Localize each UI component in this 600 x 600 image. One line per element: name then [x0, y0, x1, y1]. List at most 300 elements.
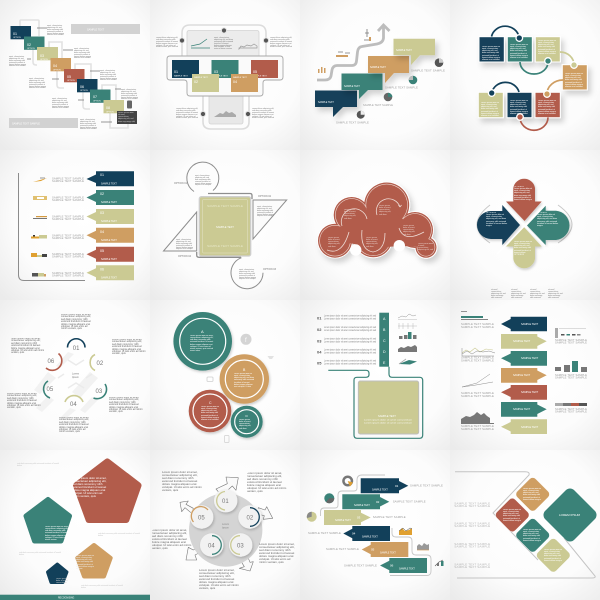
- tab 03: SAMPLE TEXT: [214, 74, 229, 78]
- dots: [179, 28, 269, 117]
- step 01: 01: [73, 346, 80, 352]
- pentagon teal: Lorem ipsum dolor sit amet, consectetuer adipiscing elit, sed diam nonummy nibh euismod tincidunt ut laoreet dolore magna aliquam erat volutpat. Ut wisi enim ad minim veniam: [45, 526, 68, 541]
- left captions: [461, 322, 494, 431]
- circle A: A: [201, 329, 204, 334]
- gray captions: [308, 484, 443, 568]
- numbered rows: Lorem ipsum dolor sit amet consectetuer adipiscing elit sed: [324, 340, 376, 344]
- gray captions: SAMPLE TEXT SAMPLE: [454, 522, 490, 526]
- squares: [478, 37, 587, 118]
- gray captions: SAMPLE TEXT SAMPLE: [52, 271, 84, 275]
- teal column: E: [383, 361, 386, 365]
- text blocks: [156, 36, 294, 122]
- teal frame line: [328, 367, 423, 438]
- bottom text columns: [491, 288, 564, 298]
- numbered rows: Lorem ipsum dolor sit amet consectetuer adipiscing elit sed: [324, 328, 376, 332]
- center marks: [58, 360, 92, 388]
- tag 01: [361, 478, 408, 493]
- tag 03: [324, 510, 371, 525]
- gray captions: SAMPLE TEXT SAMPLE: [363, 103, 393, 107]
- tag 01: 01: [395, 484, 399, 488]
- square texts: [481, 40, 584, 116]
- text blocks: [176, 174, 275, 281]
- diamond olive: Lorem ipsum dolor sit amet, consectetuer adipiscing elit, sed diam nonummy nibh euismod tincidunt ut laoreet dolore magna: [544, 549, 562, 562]
- left triangle: [164, 212, 197, 251]
- outline arrows: [180, 477, 273, 571]
- cloud inner fill: [320, 184, 435, 256]
- left captions: SAMPLE TEXT SAMPLE: [461, 424, 494, 428]
- cross frame: [167, 56, 283, 96]
- arrow bottom olive: OPTION 03: [514, 254, 524, 256]
- gray captions: SAMPLE TEXT SAMPLE: [373, 515, 406, 519]
- arc arrows: [327, 199, 424, 252]
- banner bottom: SAMPLE TEXT SAMPLE: [12, 122, 40, 126]
- numbered rows: 02: [317, 327, 322, 332]
- gray captions: SAMPLE TEXT SAMPLE: [393, 500, 426, 504]
- tag 01: SAMPLE TEXT: [372, 488, 388, 492]
- left captions: SAMPLE TEXT SAMPLE: [461, 358, 494, 362]
- olive square: [199, 197, 251, 256]
- step 05: OPTION: [67, 80, 75, 82]
- step 07: 07: [93, 95, 97, 99]
- gray captions: [336, 68, 445, 124]
- panel: lettered column with big box: [317, 313, 423, 438]
- arrow right teal: Lorem ipsum dolor sit amet, consectetuer adipiscing elit, sed diam nonummy nibh euismod tincidunt ut laoreet dolore magna: [537, 214, 558, 227]
- step 08: OPTION: [106, 112, 114, 114]
- gray captions: SAMPLE TEXT SAMPLE: [454, 565, 490, 569]
- arrow bottom olive: Lorem ipsum dolor sit amet, consectetuer adipiscing elit, sed diam nonummy nibh euismod tincidunt ut laoreet dolore: [514, 241, 532, 254]
- panel: staircase speech bubbles: [315, 25, 445, 124]
- tag teal: SAMPLE TEXT: [521, 357, 539, 360]
- tab 04: 04: [233, 80, 237, 84]
- node 05: [190, 505, 213, 529]
- olive square: SAMPLE TEXT SAMPLE: [207, 245, 243, 248]
- outer frame: [197, 194, 252, 257]
- tab 05: 05: [253, 70, 257, 74]
- tag 02: 02: [376, 500, 380, 504]
- big diamond: [541, 486, 599, 544]
- gray captions: SAMPLE TEXT SAMPLE: [52, 274, 84, 278]
- gray captions: SAMPLE TEXT SAMPLE: [52, 234, 84, 238]
- option labels: OPTION 04: [178, 255, 192, 258]
- circle A: [173, 312, 232, 371]
- left captions: SAMPLE TEXT SAMPLE: [461, 394, 494, 398]
- left captions: SAMPLE TEXT SAMPLE: [461, 322, 494, 326]
- numbered rows: Lorem ipsum dolor sit amet consectetuer adipiscing elit sed: [324, 350, 376, 354]
- tag 03: 03: [100, 211, 104, 215]
- gray captions: SAMPLE TEXT SAMPLE: [454, 544, 490, 548]
- arrow left navy: OPTION 04: [486, 212, 496, 214]
- mini charts: [398, 314, 417, 364]
- tag 05: 05: [100, 249, 104, 253]
- tag 03: [86, 209, 134, 224]
- icon: device: [127, 100, 132, 108]
- tag 02: 02: [100, 192, 104, 196]
- right triangle: [253, 200, 287, 239]
- gray captions: SAMPLE TEXT SAMPLE: [336, 120, 369, 124]
- pentagon teal: [26, 500, 70, 542]
- node 05: 05: [198, 516, 205, 522]
- tag 02: [342, 494, 389, 509]
- cloud fill: [318, 182, 436, 258]
- panel: pentagons: [0, 462, 150, 600]
- step 03: [37, 47, 58, 61]
- gray captions: SAMPLE TEXT SAMPLE: [52, 252, 84, 256]
- gray captions: [52, 176, 84, 278]
- panel: alternating arrow tags with charts: [461, 312, 587, 434]
- right captions: SAMPLE TEXT SAMPLE: [555, 340, 587, 344]
- tag red: SAMPLE TEXT: [521, 391, 539, 394]
- frame line: [18, 173, 85, 280]
- outer pale ring: [319, 184, 435, 256]
- step 01: [10, 26, 31, 39]
- pies: [307, 476, 353, 522]
- circle B: B: [243, 368, 246, 372]
- text blocks: [152, 471, 298, 592]
- big disc: [189, 493, 262, 567]
- top gray panel: [187, 30, 259, 58]
- frame lines: [455, 472, 595, 578]
- diamond red: Lorem ipsum dolor sit amet, consectetuer adipiscing elit, sed diam nonummy nibh euismod tincidunt ut laoreet dolore magna: [503, 509, 521, 522]
- gray captions: SAMPLE TEXT SAMPLE: [454, 542, 490, 546]
- bubble navy: SAMPLE TEXT: [318, 101, 334, 104]
- panel: left pointing tag list: [18, 171, 134, 280]
- gray captions: SAMPLE TEXT SAMPLE: [308, 531, 341, 535]
- gray captions: [454, 502, 490, 569]
- left captions: SAMPLE TEXT SAMPLE: [461, 356, 494, 360]
- numbered rows: Lorem ipsum dolor sit amet consectetuer adipiscing elit sed: [324, 348, 376, 352]
- numbered rows: 05: [317, 360, 322, 366]
- side arcs: [477, 205, 572, 243]
- stair arrow: [317, 25, 390, 80]
- gray captions: SAMPLE TEXT SAMPLE: [52, 214, 84, 218]
- diamond teal: Lorem ipsum dolor sit amet, consectetuer adipiscing elit, sed diam nonummy nibh euismod tincidunt ut laoreet dolore magna: [523, 529, 541, 542]
- option labels: [174, 182, 277, 271]
- left charts: [461, 312, 495, 424]
- icon: phone: [224, 436, 229, 442]
- diamond red: [494, 497, 531, 533]
- tag 01: 01: [100, 173, 104, 177]
- big diamond: LOREM IPSUM: [559, 513, 581, 517]
- step 04: OPTION: [53, 70, 61, 72]
- gray captions: SAMPLE TEXT SAMPLE: [52, 236, 84, 240]
- panel: four circles: [173, 312, 274, 442]
- bubble olive: SAMPLE TEXT: [396, 49, 412, 52]
- tag 05: SAMPLE TEXT: [380, 552, 396, 554]
- pentagon navy: [48, 564, 68, 587]
- numbered rows: Lorem ipsum dolor sit amet consectetuer adipiscing elit sed: [324, 314, 376, 318]
- step 05: 05: [46, 387, 54, 393]
- option labels: OPTION 02: [258, 195, 272, 198]
- step 05: [64, 69, 84, 82]
- tag 06: 06: [390, 564, 394, 568]
- tag 02: [86, 190, 134, 205]
- connector loops: [20, 20, 128, 128]
- numbered rows: Lorem ipsum dolor sit amet consectetuer adipiscing elit sed: [324, 336, 376, 340]
- gray captions: SAMPLE TEXT SAMPLE: [454, 562, 490, 566]
- tag olive: SAMPLE TEXT: [513, 340, 531, 343]
- tag 04: SAMPLE TEXT: [101, 239, 117, 242]
- step 01: OPTION: [13, 37, 21, 39]
- option labels: OPTION 03: [263, 268, 277, 271]
- gray captions: SAMPLE TEXT SAMPLE: [52, 179, 84, 183]
- center label: [222, 523, 229, 530]
- panel: zigzag arrow tags: [307, 475, 444, 576]
- numbered rows: Lorem ipsum dolor sit amet consectetuer adipiscing elit sed: [324, 316, 376, 320]
- gray captions: SAMPLE TEXT SAMPLE: [454, 504, 490, 508]
- tag 03: SAMPLE TEXT: [101, 220, 117, 223]
- left captions: SAMPLE TEXT SAMPLE: [461, 427, 494, 431]
- bottom gray panel: [209, 94, 243, 124]
- node 03: 03: [237, 544, 244, 550]
- long shadows: [34, 352, 98, 420]
- gray captions: SAMPLE TEXT SAMPLE: [454, 502, 490, 506]
- tag 04: 04: [352, 532, 356, 536]
- icon: printer: [207, 377, 213, 382]
- tag 04: 04: [100, 230, 104, 234]
- step 02: 02: [27, 43, 31, 47]
- circle D: [231, 406, 263, 438]
- tab 03: 03: [214, 70, 218, 74]
- tag 06: [86, 265, 134, 280]
- gray captions: SAMPLE TEXT SAMPLE: [410, 484, 443, 488]
- tag 06: 06: [100, 268, 104, 272]
- left captions: SAMPLE TEXT SAMPLE: [461, 325, 494, 329]
- gray captions: SAMPLE TEXT SAMPLE: [52, 196, 84, 200]
- panel: diagonal step options: [9, 20, 140, 129]
- tab 04: [231, 74, 258, 92]
- numbered rows: [317, 314, 376, 366]
- circle D: D: [246, 414, 248, 418]
- bubble teal: SAMPLE TEXT: [344, 85, 360, 88]
- mini charts: [399, 528, 444, 566]
- diamond teal: [514, 517, 551, 554]
- tab 02: 02: [194, 80, 198, 84]
- gray captions: SAMPLE TEXT SAMPLE: [52, 254, 84, 258]
- panel: cross frame with five tabs: [156, 25, 294, 129]
- teal column: D: [383, 350, 386, 354]
- pentagon orange: Lorem ipsum dolor sit amet, consectetuer adipiscing elit, sed diam nonummy nibh euismod tincidunt ut laoreet dolore magna aliquam: [76, 555, 94, 570]
- banner top: SAMPLE TEXT: [87, 28, 105, 32]
- tag 04: [86, 228, 134, 243]
- bottom loop: [203, 96, 249, 129]
- arrow left navy: [477, 205, 520, 245]
- step 02: OPTION: [27, 48, 35, 50]
- step 06: 06: [48, 359, 55, 365]
- cloud base: [317, 182, 438, 259]
- mini charts: [31, 178, 47, 276]
- teal column: B: [383, 328, 386, 332]
- numbered rows: Lorem ipsum dolor sit amet consectetuer adipiscing elit sed: [324, 358, 376, 362]
- teal column: C: [383, 339, 386, 343]
- center label: Lorem: [222, 523, 229, 526]
- olive square: SAMPLE TEXT SAMPLE: [207, 205, 243, 208]
- step 06: OPTION: [80, 90, 88, 92]
- gray captions: SAMPLE TEXT SAMPLE: [385, 86, 418, 90]
- panel: red cloud of circles: [317, 182, 438, 259]
- node 02: 02: [246, 516, 254, 522]
- tag 05: 05: [371, 548, 375, 552]
- mini charts: [318, 29, 371, 73]
- gray captions: SAMPLE TEXT SAMPLE: [411, 68, 445, 72]
- olive square: SAMPLE TEXT: [216, 225, 234, 229]
- gray captions: SAMPLE TEXT SAMPLE: [454, 524, 490, 528]
- circle A: Lorem ipsum dolor sit amet, consectetuer adipiscing elit, sed diam nonummy nibh euismod tincidunt ut laoreet dolore magna aliquam erat volutpat. Ut wisi enim ad minim veniam, quis nostrud exerci tation: [190, 335, 213, 352]
- step 07: OPTION: [93, 100, 101, 102]
- right charts: [555, 328, 587, 406]
- step 01: 01: [13, 32, 17, 36]
- center label: Ipsum: [72, 376, 79, 379]
- teal column: A: [383, 317, 386, 321]
- tag 04: [343, 526, 390, 541]
- arrow top red: Lorem ipsum dolor sit amet, consectetuer adipiscing elit, sed diam nonummy nibh euismod tincidunt ut laoreet dolore magna: [514, 188, 532, 201]
- text blocks: [328, 205, 434, 252]
- top loop: [182, 25, 266, 58]
- connector dots: [488, 35, 577, 120]
- arrow top red: [506, 179, 542, 221]
- step 05: 05: [67, 75, 71, 79]
- right captions: SAMPLE TEXT SAMPLE: [555, 407, 587, 411]
- panel: square with triangles and circles: [164, 162, 287, 289]
- numbered rows: Lorem ipsum dolor sit amet consectetuer adipiscing elit sed: [324, 362, 376, 366]
- panel: six step ring: [7, 314, 146, 437]
- top circle: [187, 162, 219, 192]
- gray captions: SAMPLE TEXT SAMPLE: [326, 547, 359, 551]
- step 08: 08: [106, 106, 110, 110]
- tag 06: [380, 558, 427, 573]
- tab 02: SAMPLE TEXT: [194, 76, 209, 79]
- tab 01: [172, 60, 199, 78]
- white dividers: [497, 204, 546, 254]
- panel: four arrow petals: [477, 179, 572, 298]
- gray captions: SAMPLE TEXT SAMPLE: [52, 176, 84, 180]
- bottom circle: [231, 258, 263, 289]
- olive box: [358, 381, 419, 434]
- diamond orange: [514, 476, 551, 513]
- bottom bar: [0, 595, 150, 600]
- tab 02: [192, 74, 219, 92]
- step 08: [104, 100, 124, 114]
- pentagon red: [72, 462, 138, 520]
- text blocks: [7, 314, 146, 437]
- step 04: 04: [53, 64, 57, 68]
- tag 05: [86, 247, 134, 262]
- tag 06: SAMPLE TEXT: [399, 568, 415, 570]
- numbered rows: 04: [317, 350, 322, 354]
- numbered rows: Lorem ipsum dolor sit amet consectetuer adipiscing elit sed: [324, 325, 376, 329]
- right captions: SAMPLE TEXT SAMPLE: [555, 338, 587, 342]
- charts: [191, 39, 257, 117]
- gray captions: SAMPLE TEXT SAMPLE: [52, 198, 84, 202]
- option labels: OPTION 01: [174, 182, 188, 185]
- circle C: C: [209, 401, 212, 405]
- teal column: [379, 313, 389, 367]
- tag 04: SAMPLE TEXT: [362, 536, 378, 538]
- center label: Lorem: [72, 372, 79, 376]
- tab 03: [212, 60, 238, 78]
- panel: linked squares: [478, 26, 587, 130]
- tag 05: [362, 542, 408, 557]
- tag 02: SAMPLE TEXT: [354, 504, 370, 507]
- center label: Ipsum: [222, 526, 229, 530]
- pentagon navy: Lorem ipsum dolor sit amet, consectetuer: [56, 578, 68, 584]
- step 04: 04: [70, 402, 77, 408]
- node 04: 04: [208, 544, 215, 550]
- tag orange: SAMPLE TEXT: [513, 374, 531, 377]
- tag 02: SAMPLE TEXT: [101, 201, 117, 204]
- tag navy: SAMPLE TEXT: [521, 323, 539, 326]
- arrow left navy: Lorem ipsum dolor sit amet, consectetuer adipiscing elit, sed diam nonummy nibh euismod tincidunt ut laoreet dolore magna: [486, 214, 507, 227]
- node 01: 01: [222, 499, 229, 505]
- tag 01: [86, 171, 134, 186]
- stair lines: [320, 475, 431, 576]
- step 06: [77, 79, 98, 92]
- arrow right teal: [527, 206, 569, 245]
- numbered rows: 03: [317, 338, 322, 344]
- tab 01: SAMPLE TEXT: [174, 74, 189, 78]
- white holes: [350, 240, 405, 256]
- icon: wifi: [268, 356, 274, 359]
- right captions: [555, 338, 587, 414]
- panel: diamonds: [454, 472, 599, 578]
- step 03: 03: [96, 389, 103, 395]
- olive box: Lorem ipsum dolor sit amet consectetuer: [364, 418, 412, 422]
- tab 01: 01: [174, 70, 178, 74]
- captions: [17, 462, 143, 590]
- step 02: 02: [96, 361, 104, 367]
- circle C: [189, 390, 231, 432]
- gray captions: SAMPLE TEXT SAMPLE: [344, 564, 377, 568]
- step 07: [90, 90, 110, 103]
- connector arcs: [492, 26, 574, 130]
- tag 05: SAMPLE TEXT: [101, 258, 117, 261]
- tag 03: 03: [357, 516, 361, 520]
- tag 01: SAMPLE TEXT: [101, 182, 117, 186]
- bottom bar: RECOGNISING: [58, 598, 75, 600]
- node 04: [200, 533, 223, 557]
- step 04: [50, 58, 71, 72]
- tab 05: SAMPLE TEXT: [253, 74, 268, 78]
- arrow bottom olive: [506, 227, 542, 268]
- tag teal right: SAMPLE TEXT: [513, 408, 531, 411]
- node 02: [238, 505, 262, 529]
- arrow right teal: OPTION 02: [537, 212, 547, 214]
- tab 05: [251, 60, 278, 78]
- panel: gear wheel with five nodes: [152, 471, 298, 592]
- center label: [72, 372, 79, 379]
- icon: social circle: f: [245, 338, 247, 344]
- step 03: 03: [40, 54, 44, 58]
- pentagon orange: [76, 545, 111, 576]
- text blocks and pointers: [9, 24, 139, 129]
- step 06: 06: [80, 85, 84, 89]
- node 03: [229, 533, 252, 557]
- step 03: OPTION: [40, 59, 48, 61]
- tag 06: SAMPLE TEXT: [101, 276, 117, 280]
- gray captions: SAMPLE TEXT SAMPLE: [52, 217, 84, 221]
- circle B: [220, 354, 269, 404]
- arrow top red: OPTION 01: [514, 186, 524, 188]
- right captions: SAMPLE TEXT SAMPLE: [555, 373, 587, 377]
- node 01: [214, 489, 237, 512]
- bubble orange: SAMPLE TEXT: [370, 66, 386, 69]
- numbered rows: 01: [317, 316, 322, 320]
- diamond olive: [535, 537, 572, 574]
- pies: [357, 58, 443, 119]
- olive box: Lorem ipsum dolor sit amet consectetuer: [364, 422, 412, 424]
- diamond orange: Lorem ipsum dolor sit amet, consectetuer adipiscing elit, sed diam nonummy nibh euismod tincidunt ut laoreet dolore magna: [523, 488, 541, 501]
- left captions: SAMPLE TEXT SAMPLE: [461, 391, 494, 395]
- tag 03: SAMPLE TEXT: [335, 519, 351, 522]
